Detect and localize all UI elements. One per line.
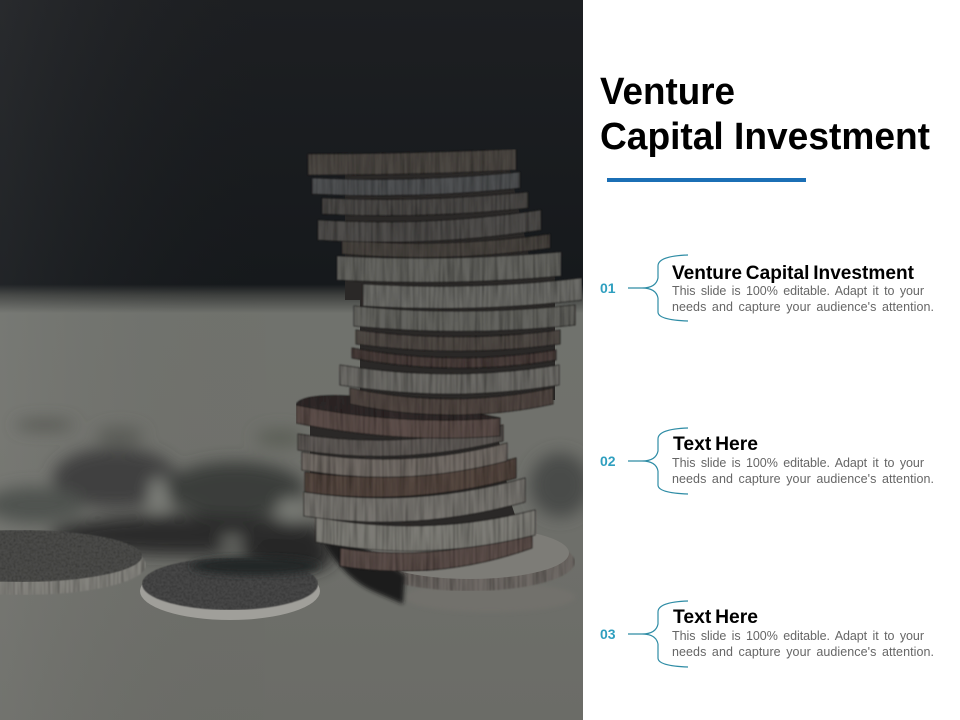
body 03: needs and capture your audience's attention. [672,645,934,659]
body 02: This slide is 100% editable. Adapt it to your [672,456,924,470]
number 01: 01 [600,280,616,296]
bracket 03 [628,601,688,667]
coin stack [296,149,582,571]
item 01 [600,255,934,321]
stack backing [310,170,555,545]
item 02 [600,428,934,494]
number 02: 02 [600,453,616,469]
heading 02: Text Here [673,434,758,455]
title [600,71,930,158]
foreground flat coin [140,557,320,620]
body 01: needs and capture your audience's attention. [672,300,934,314]
bracket 01 [628,255,688,321]
body 02: needs and capture your audience's attention. [672,472,934,486]
body 03: This slide is 100% editable. Adapt it to your [672,629,924,643]
item 03 [600,601,934,667]
title: Venture [600,71,735,113]
lower right coins and shadow [322,534,575,606]
heading 03: Text Here [673,607,758,628]
body 01: This slide is 100% editable. Adapt it to your [672,284,924,298]
heading 01: Venture Capital Investment [672,263,915,284]
bracket 02 [628,428,688,494]
photo: stacked coins [0,0,590,720]
title: Capital Investment [600,116,930,158]
number 03: 03 [600,626,616,642]
title underline [607,178,806,182]
foreground left coin [0,530,146,595]
